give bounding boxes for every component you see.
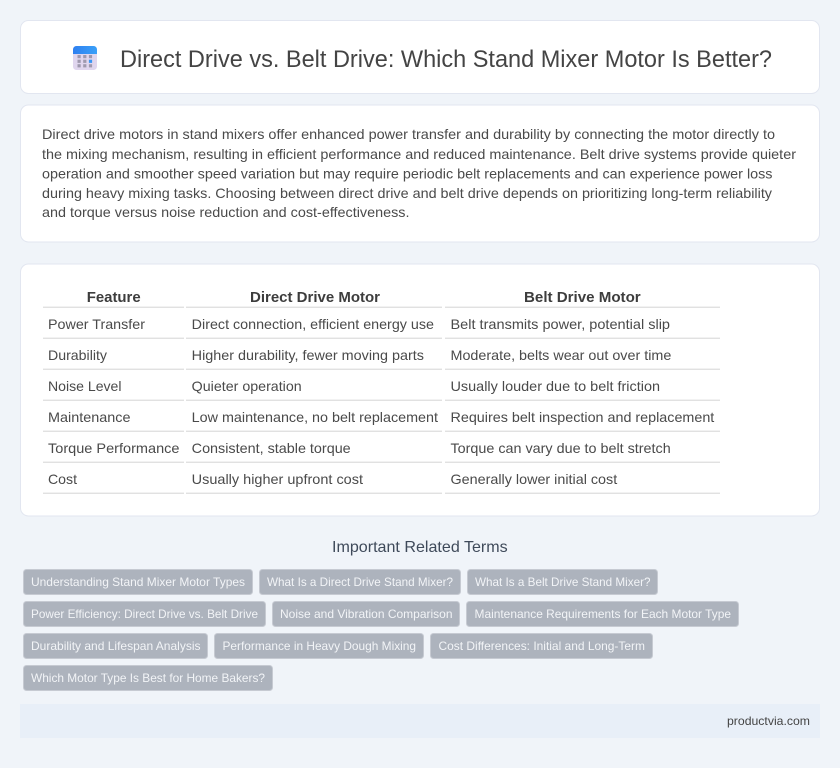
summary text	[42, 126, 796, 220]
row: power transfer: Power Transfer	[48, 316, 145, 332]
row: noise level	[48, 378, 660, 394]
chip: Performance in Heavy Dough Mixing	[222, 639, 416, 653]
row: durability: Durability	[48, 347, 107, 363]
footer: productvia.com	[727, 714, 810, 728]
row: maintenance: Requires belt inspection and replacement	[450, 409, 714, 425]
chip	[24, 602, 266, 626]
summary text: and torque versus noise reduction and cost-effectiveness.	[42, 204, 410, 220]
summary text: Direct drive motors in stand mixers offer enhanced power transfer and durability by connecting the motor directly to	[42, 126, 775, 142]
chip: Understanding Stand Mixer Motor Types	[31, 575, 245, 589]
row: maintenance: Maintenance	[48, 409, 131, 425]
table header row: Belt Drive Motor	[524, 289, 641, 306]
chip	[24, 634, 208, 658]
summary text: the mixing mechanism, resulting in efficient performance and reduced maintenance. Belt drive systems provide quieter	[42, 146, 796, 162]
row: durability: Moderate, belts wear out over time	[450, 347, 672, 363]
table header row: Feature	[87, 289, 141, 306]
chip: Which Motor Type Is Best for Home Bakers?	[31, 671, 265, 685]
chip: What Is a Direct Drive Stand Mixer?	[267, 575, 453, 589]
row: power transfer	[48, 316, 670, 332]
chip	[430, 634, 652, 658]
row: noise level: Usually louder due to belt friction	[450, 378, 660, 394]
summary text: operation and smoother speed variation but may require periodic belt replacements and can experience power loss	[42, 166, 772, 182]
row: torque performance: Torque can vary due to belt stretch	[450, 440, 671, 456]
icon: calendar	[73, 46, 97, 70]
row: maintenance: Low maintenance, no belt replacement	[192, 409, 438, 425]
chip: Noise and Vibration Comparison	[280, 607, 452, 621]
chip: Cost Differences: Initial and Long-Term	[438, 639, 645, 653]
row: cost: Generally lower initial cost	[450, 471, 617, 487]
panel: comparison table	[20, 264, 820, 516]
row: cost	[48, 471, 617, 487]
table header row	[87, 289, 641, 306]
chip	[272, 602, 460, 626]
panel: title header	[20, 20, 820, 94]
row: torque performance	[48, 440, 671, 456]
chip	[260, 570, 460, 594]
table header row: Direct Drive Motor	[250, 289, 380, 306]
footer	[20, 704, 820, 738]
row: cost: Usually higher upfront cost	[192, 471, 363, 487]
chip	[468, 570, 658, 594]
row: noise level: Noise Level	[48, 378, 122, 394]
heading: important related terms: Important Related Terms	[332, 539, 508, 556]
chip: Durability and Lifespan Analysis	[31, 639, 200, 653]
row: noise level: Quieter operation	[192, 378, 302, 394]
chip: Power Efficiency: Direct Drive vs. Belt Drive	[31, 607, 258, 621]
row: torque performance: Consistent, stable torque	[192, 440, 351, 456]
row: cost: Cost	[48, 471, 77, 487]
title: Direct Drive vs. Belt Drive: Which Stand Mixer Motor Is Better?	[120, 46, 772, 73]
panel: summary paragraph	[20, 105, 820, 242]
chip: What Is a Belt Drive Stand Mixer?	[475, 575, 651, 589]
row: power transfer: Direct connection, efficient energy use	[192, 316, 434, 332]
chip	[214, 634, 424, 658]
related terms chips	[24, 570, 738, 690]
row: maintenance	[48, 409, 714, 425]
summary text: during heavy mixing tasks. Choosing between direct drive and belt drive depends on prioritizing long-term reliability	[42, 185, 772, 201]
row: torque performance: Torque Performance	[48, 440, 180, 456]
chip	[24, 570, 252, 594]
chip: Maintenance Requirements for Each Motor Type	[474, 607, 731, 621]
row: power transfer: Belt transmits power, potential slip	[450, 316, 670, 332]
row: durability: Higher durability, fewer moving parts	[192, 347, 424, 363]
row: durability	[48, 347, 672, 363]
chip	[466, 602, 738, 626]
chip	[24, 666, 272, 690]
